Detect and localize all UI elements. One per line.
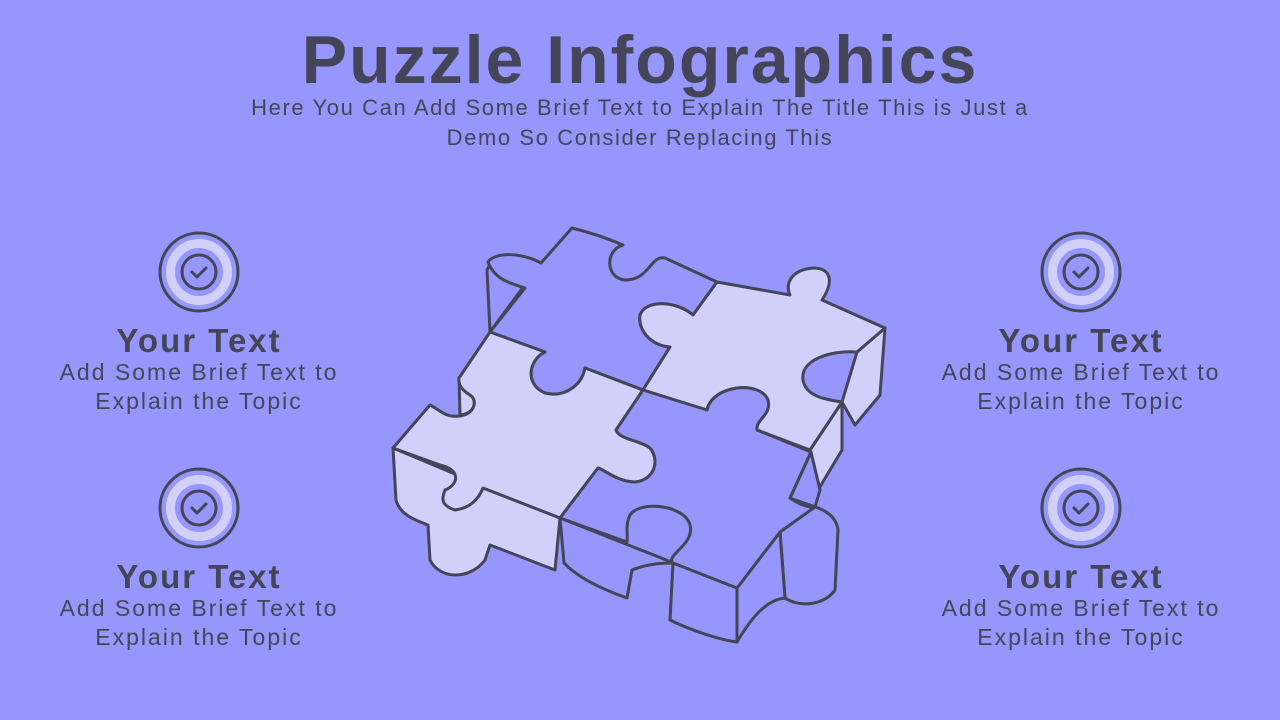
icon: check	[1040, 468, 1122, 548]
icon: check	[158, 232, 240, 312]
subtitle: Demo So Consider Replacing This	[447, 125, 833, 150]
subtitle: Here You Can Add Some Brief Text to Explain The Title This is Just a	[251, 95, 1029, 120]
item: bottom left: Your Text	[116, 558, 282, 595]
icon: check	[158, 468, 240, 548]
item: top left	[60, 232, 338, 414]
item: top left: Your Text	[116, 322, 282, 359]
item: top right: Explain the Topic	[977, 388, 1185, 414]
subtitle	[251, 95, 1029, 150]
item: top right	[942, 232, 1220, 414]
item: top right: Your Text	[998, 322, 1164, 359]
piece B	[640, 268, 885, 450]
title: Puzzle Infographics	[302, 22, 978, 98]
piece C	[393, 332, 655, 518]
item: bottom left	[60, 468, 338, 650]
item: bottom left: Add Some Brief Text to	[60, 595, 338, 621]
item: top left: Explain the Topic	[95, 388, 303, 414]
item: bottom right: Explain the Topic	[977, 624, 1185, 650]
piece D	[560, 388, 815, 588]
item: bottom right: Your Text	[998, 558, 1164, 595]
icon: check	[1040, 232, 1122, 312]
item: bottom right	[942, 468, 1220, 650]
item: bottom right: Add Some Brief Text to	[942, 595, 1220, 621]
side faces	[842, 328, 885, 425]
piece A	[488, 228, 717, 394]
item: top left: Add Some Brief Text to	[60, 359, 338, 385]
item: top right: Add Some Brief Text to	[942, 359, 1220, 385]
item: bottom left: Explain the Topic	[95, 624, 303, 650]
